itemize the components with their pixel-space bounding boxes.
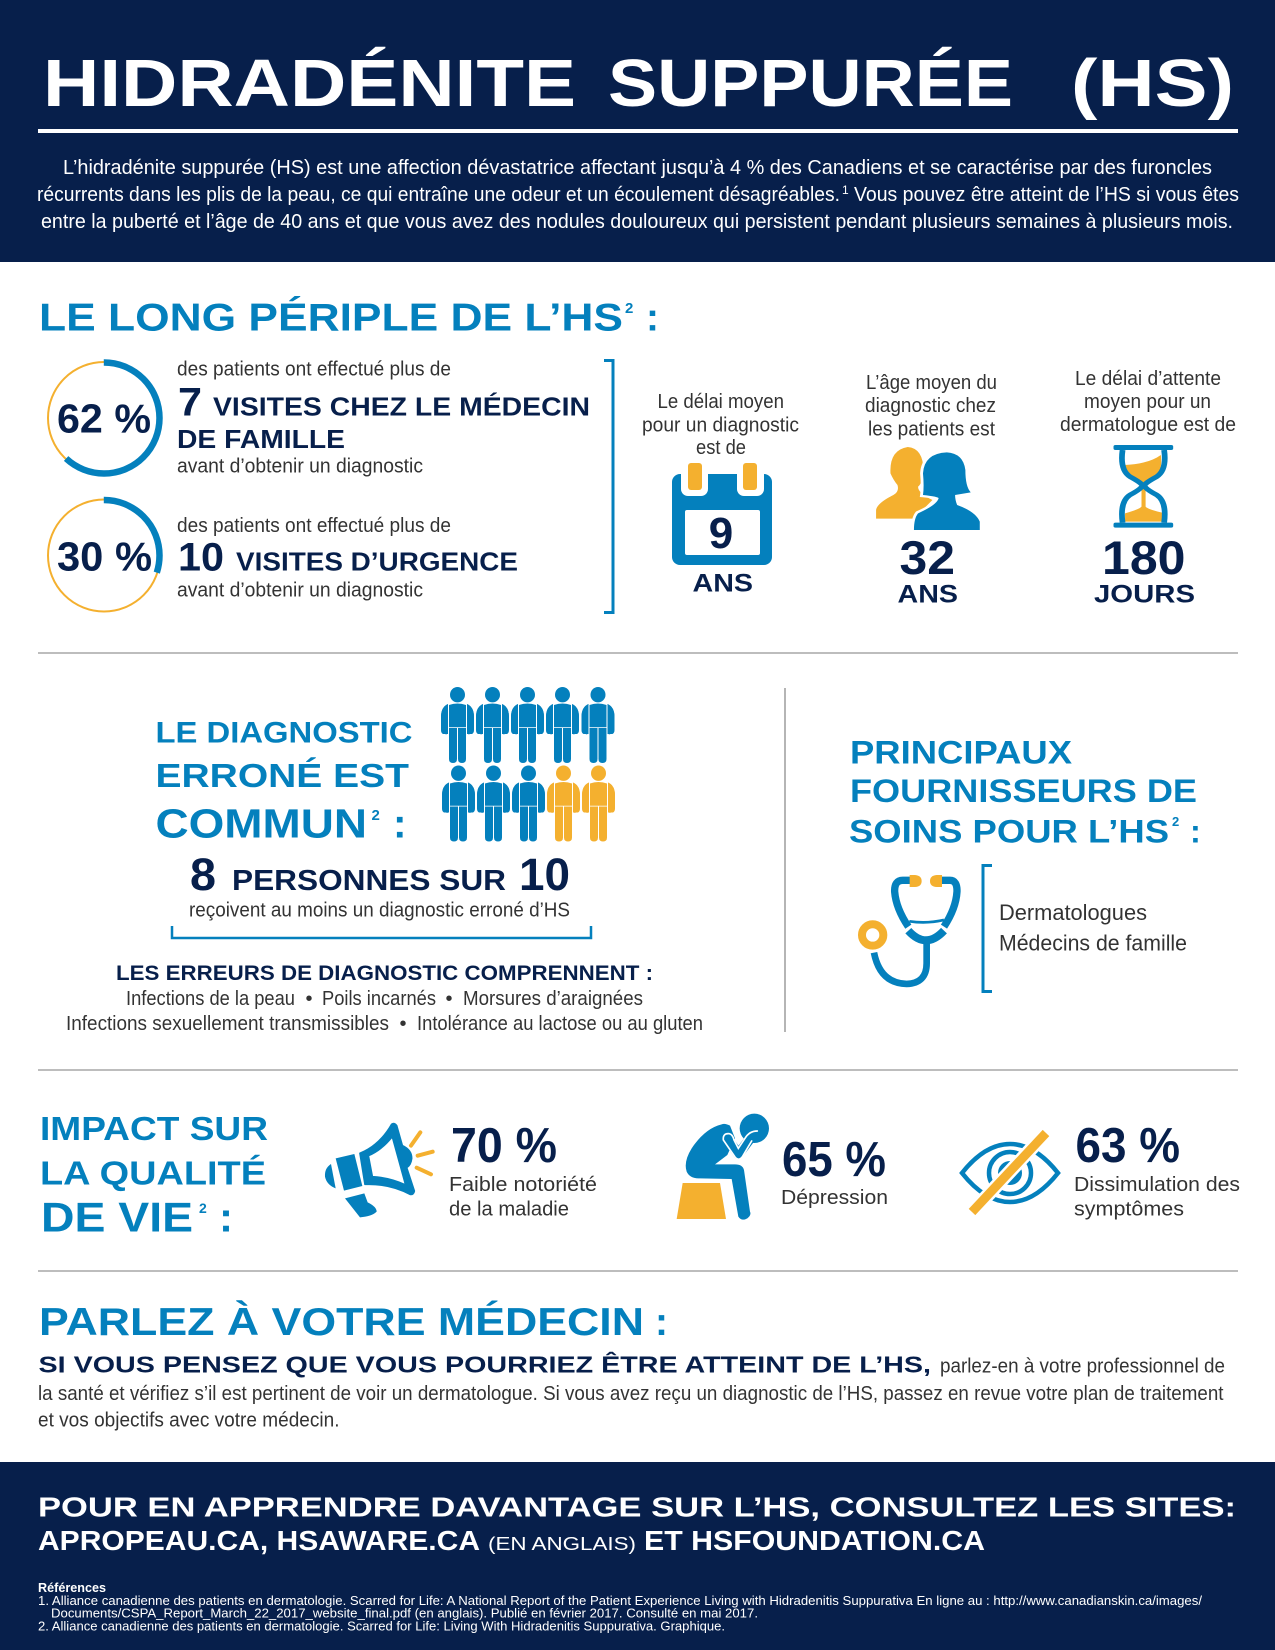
stat: 8 personnes sur 10: reçoivent au moins un diagnostic erroné d’HS [189, 900, 570, 922]
stat: âge 32 ans: ANS [898, 580, 958, 608]
heading: impact sur la qualité de vie: DE VIE [41, 1194, 193, 1240]
icon: calendar: 9 [709, 509, 733, 558]
stat: 65 % [781, 1133, 888, 1209]
references: Références [38, 1581, 106, 1595]
list: erreurs de diagnostic: LES ERREURS DE DIAGNOSTIC COMPRENNENT : [116, 962, 653, 985]
text block: advice: la santé et vérifiez s’il est pertinent de voir un dermatologue. Si vous avez reçu un diagnostic de l’HS, passez en revue votre plan de traitement [38, 1383, 1224, 1405]
list: fournisseurs: Dermatologues [999, 900, 1147, 925]
title: (HS) [1071, 46, 1234, 121]
list: erreurs de diagnostic: Infections sexuellement transmissibles [66, 1013, 389, 1035]
heading: principaux fournisseurs: 2 [1172, 814, 1179, 829]
title: HIDRADÉNITE [43, 46, 576, 121]
text block: advice [38, 1350, 1225, 1432]
icon: stethoscope [862, 875, 957, 984]
title [43, 46, 1234, 121]
bracket [604, 360, 613, 612]
stat: délai 9 ans: Le délai moyen [658, 391, 784, 413]
stat: 10 visites [177, 515, 518, 602]
references: 1. Alliance canadienne des patients en dermatologie. Scarred for Life: A National Report of the Patient Experience Living with Hidradenitis Suppurativa En ligne au : http://www.canadianskin.ca/images/ [38, 1594, 1203, 1608]
stat: 70 %: Faible notoriété [449, 1174, 597, 1196]
intro text: Vous pouvez être atteint de l’HS si vous êtes [854, 184, 1239, 206]
icon: hourglass [1114, 445, 1173, 528]
footer call to action [38, 1492, 1236, 1556]
stat: 8 personnes sur 10 [189, 849, 570, 922]
text block: advice: parlez-en à votre professionnel de [940, 1356, 1225, 1378]
bracket [172, 926, 591, 938]
donut: 62 % [48, 362, 160, 474]
heading: principaux fournisseurs: PRINCIPAUX [850, 734, 1072, 770]
stat: 7 visites: 7 [178, 380, 202, 424]
text block: advice: SI VOUS PENSEZ QUE VOUS POURRIEZ ÊTRE ATTEINT DE L’HS, [38, 1350, 931, 1378]
title: SUPPURÉE [608, 46, 1013, 121]
heading: impact sur la qualité de vie [40, 1111, 268, 1240]
list: erreurs de diagnostic [66, 962, 703, 1035]
heading: impact sur la qualité de vie: IMPACT SUR [40, 1111, 268, 1148]
stat: attente 180 jours [1060, 368, 1236, 608]
stat: délai 9 ans: ANS [692, 570, 753, 598]
stat: âge 32 ans: diagnostic chez [865, 395, 996, 417]
heading: diagnostic erroné: COMMUN [156, 800, 367, 846]
heading: diagnostic erroné [156, 716, 412, 846]
heading: principaux fournisseurs: SOINS POUR L’HS [849, 814, 1169, 850]
stat: 70 %: 70 % [451, 1119, 557, 1173]
stat: délai 9 ans: pour un diagnostic [642, 414, 799, 436]
icon: crossed eye [962, 1133, 1058, 1212]
list: fournisseurs: Médecins de famille [999, 930, 1187, 956]
intro text: entre la puberté et l’âge de 40 ans et que vous avez des nodules douloureux qui persistent pendant plusieurs semaines à plusieurs mois. [41, 211, 1233, 233]
icon: calendar [672, 460, 772, 565]
stat: 8 personnes sur 10: 8 [190, 849, 216, 900]
stat: 65 %: Dépression [781, 1187, 888, 1209]
stat: attente 180 jours: dermatologue est de [1060, 414, 1236, 436]
heading: principaux fournisseurs: : [1190, 814, 1201, 850]
intro text: récurrents dans les plis de la peau, ce qui entraîne une odeur et un écoulement désagréables. [37, 184, 840, 206]
stat: âge 32 ans: L’âge moyen du [866, 372, 997, 394]
list: erreurs de diagnostic: • [305, 988, 313, 1010]
stat: 10 visites: des patients ont effectué plus de [177, 515, 451, 537]
stat: 7 visites: des patients ont effectué plus de [177, 358, 451, 380]
text block: advice: et vos objectifs avec votre médecin. [38, 1410, 340, 1432]
stat: 63 %: Dissimulation des [1074, 1174, 1240, 1196]
heading: diagnostic erroné: : [393, 800, 406, 846]
pictogram: people 8 of 10 [441, 687, 615, 842]
bracket [983, 866, 992, 992]
donut: 30 %: 30 % [57, 534, 152, 580]
footer call to action: (EN ANGLAIS) [488, 1534, 636, 1554]
heading: impact sur la qualité de vie: : [219, 1194, 233, 1240]
heading: le long périple: 2 [625, 300, 633, 317]
heading: impact sur la qualité de vie: 2 [199, 1200, 207, 1216]
references [38, 1581, 1203, 1634]
intro text: L’hidradénite suppurée (HS) est une affection dévastatrice affectant jusqu’à 4 % des Canadiens et se caractérise par des furoncles [63, 157, 1212, 179]
stat: délai 9 ans: est de [696, 437, 746, 459]
list: fournisseurs [999, 900, 1187, 956]
stat: 10 visites: 10 [178, 536, 224, 580]
icon: two people [876, 447, 980, 530]
heading: impact sur la qualité de vie: LA QUALITÉ [40, 1154, 266, 1192]
list: erreurs de diagnostic: • [399, 1013, 407, 1035]
stat: 7 visites [177, 358, 590, 478]
donut: 62 %: 62 % [57, 396, 151, 442]
list: erreurs de diagnostic: Poils incarnés [322, 988, 436, 1010]
intro text: 1 [842, 183, 849, 197]
heading: principaux fournisseurs [849, 734, 1201, 850]
list: erreurs de diagnostic: Intolérance au lactose ou au gluten [417, 1013, 703, 1035]
stat: âge 32 ans: 32 [900, 532, 955, 585]
stat: 63 % [1074, 1119, 1240, 1220]
donut: 30 % [48, 500, 160, 612]
heading: principaux fournisseurs: FOURNISSEURS DE [850, 773, 1197, 809]
stat: 7 visites: avant d’obtenir un diagnostic [177, 456, 423, 478]
stat: âge 32 ans [865, 372, 997, 608]
stat: âge 32 ans: les patients est [868, 418, 995, 440]
stat: attente 180 jours: 180 [1102, 532, 1186, 585]
references: Documents/CSPA_Report_March_22_2017_website_final.pdf (en anglais). Publié en février 2017. Consulté en mai 2017. [51, 1606, 758, 1620]
heading: le long périple: LE LONG PÉRIPLE DE L’HS [39, 296, 623, 340]
stat: 70 %: de la maladie [449, 1198, 569, 1220]
stat: 63 %: symptômes [1074, 1198, 1184, 1220]
heading: diagnostic erroné: 2 [372, 807, 380, 824]
stat: 8 personnes sur 10: 10 [519, 849, 570, 900]
stat: 10 visites: avant d’obtenir un diagnostic [177, 580, 423, 602]
list: erreurs de diagnostic: Infections de la peau [126, 988, 295, 1010]
references: 2. Alliance canadienne des patients en dermatologie. Scarred for Life: Living With Hidradenitis Suppurativa. Graphique. [38, 1620, 725, 1634]
heading: parlez à votre médecin: PARLEZ À VOTRE MÉDECIN [39, 1300, 644, 1344]
footer call to action: ET HSFOUNDATION.CA [644, 1525, 985, 1556]
stat: délai 9 ans [642, 391, 799, 598]
stat: attente 180 jours: JOURS [1094, 580, 1195, 608]
stat: attente 180 jours: moyen pour un [1084, 391, 1211, 413]
footer call to action: APROPEAU.CA, HSAWARE.CA [38, 1525, 480, 1556]
intro text [37, 157, 1239, 233]
footer call to action: POUR EN APPRENDRE DAVANTAGE SUR L’HS, CONSULTEZ LES SITES: [38, 1492, 1236, 1522]
heading: le long périple: : [646, 296, 659, 340]
list: erreurs de diagnostic: • [445, 988, 453, 1010]
icon: megaphone [325, 1124, 433, 1217]
stat: 10 visites: VISITES D’URGENCE [236, 548, 518, 576]
stat: 7 visites: VISITES CHEZ LE MÉDECIN [213, 392, 590, 422]
stat: 8 personnes sur 10: PERSONNES SUR [232, 865, 506, 897]
header panel [0, 0, 1275, 262]
footer panel [0, 1462, 1275, 1650]
heading: diagnostic erroné: LE DIAGNOSTIC [156, 716, 412, 750]
stat: attente 180 jours: Le délai d’attente [1075, 368, 1221, 390]
stat: 63 %: 63 % [1076, 1119, 1180, 1173]
stat: 65 %: 65 % [782, 1133, 886, 1187]
heading: parlez à votre médecin: : [655, 1301, 668, 1344]
list: erreurs de diagnostic: Morsures d’araignées [463, 988, 643, 1010]
stat: 70 % [449, 1119, 597, 1220]
heading: diagnostic erroné: ERRONÉ EST [156, 757, 410, 795]
stat: 7 visites: DE FAMILLE [177, 426, 345, 454]
icon: depressed person [677, 1114, 769, 1220]
